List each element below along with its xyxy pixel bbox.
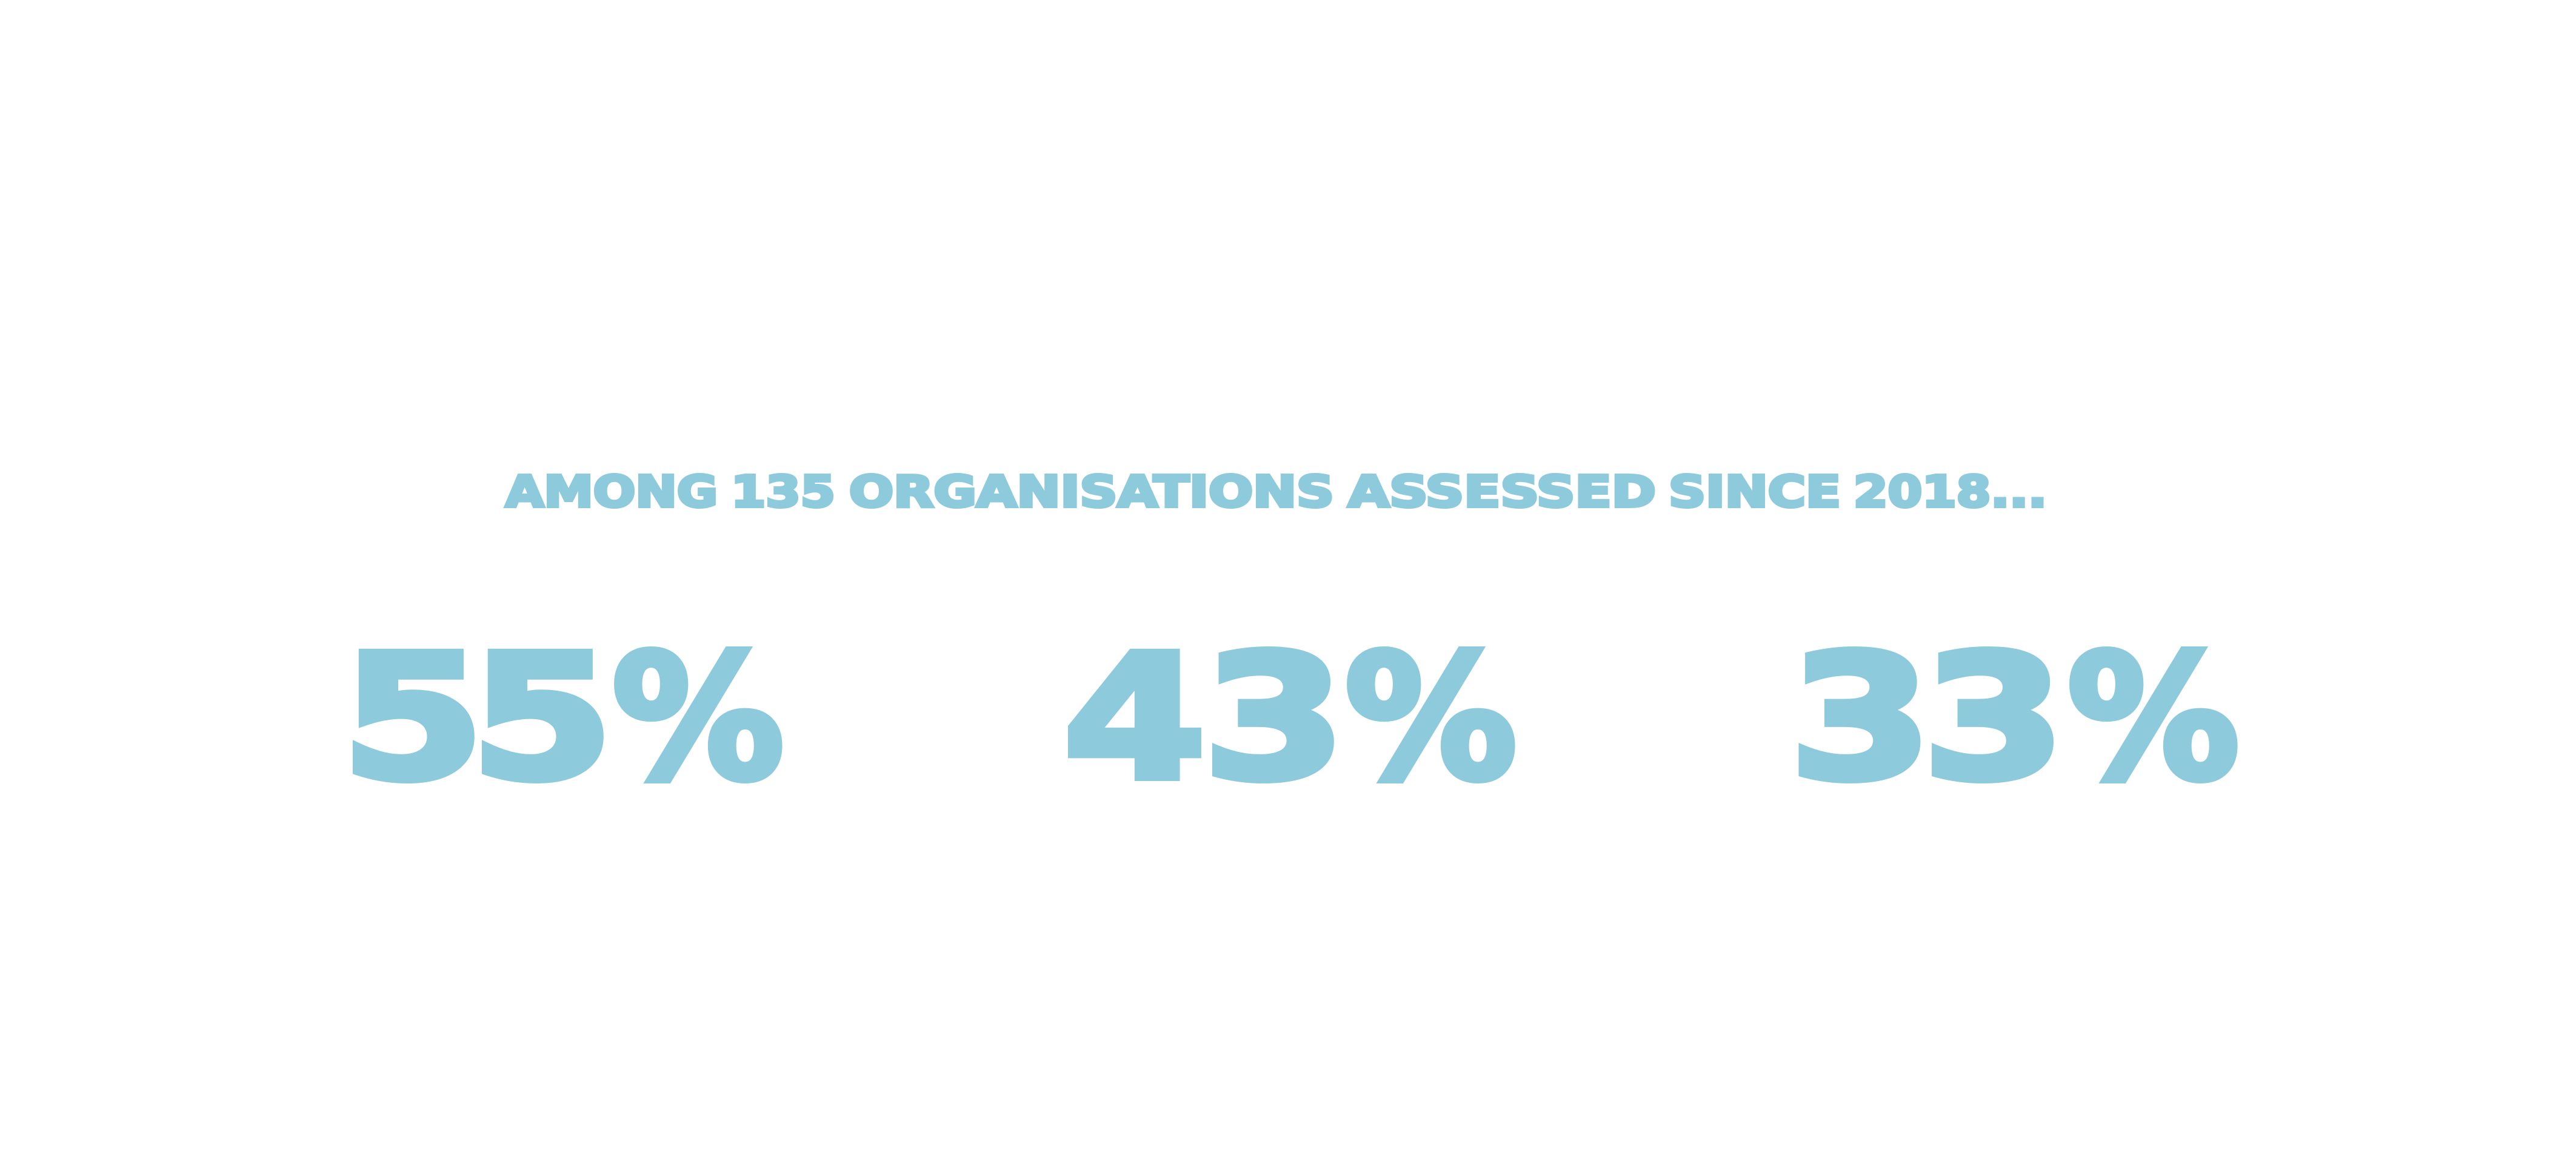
statistic: 33%: 33 — [1789, 618, 2066, 818]
statistic: 33%: % — [2067, 618, 2240, 818]
statistic: 43%: % — [1345, 618, 1517, 818]
heading: 2018... — [1854, 467, 2047, 517]
heading — [506, 467, 2047, 517]
heading: SINCE — [1669, 467, 1841, 517]
heading: AMONG — [506, 467, 718, 517]
heading: 135 — [731, 467, 835, 517]
statistic: 55%: % — [612, 618, 784, 818]
heading: ORGANISATIONS — [849, 467, 1334, 517]
statistic: 43% — [1063, 618, 1517, 818]
statistic: 55%: 55 — [341, 618, 613, 818]
heading: ASSESSED — [1348, 467, 1656, 517]
statistic: 33% — [1789, 618, 2240, 818]
statistic: 55% — [341, 618, 784, 818]
statistic: 43%: 43 — [1063, 618, 1346, 818]
